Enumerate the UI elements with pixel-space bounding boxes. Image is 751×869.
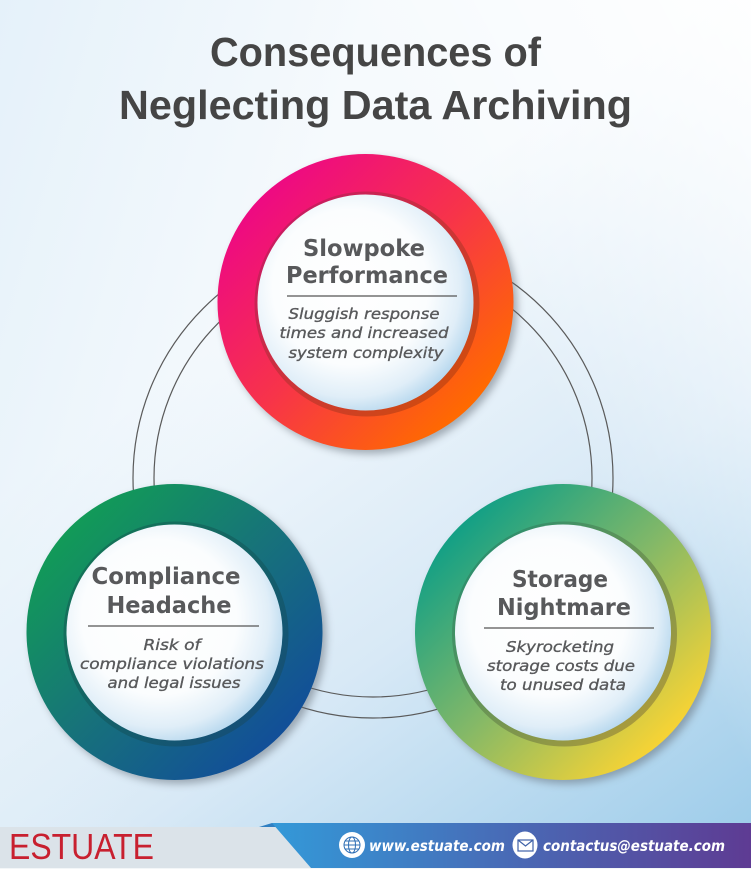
heading bbox=[497, 567, 631, 621]
panel: storage nightmare bbox=[415, 484, 715, 784]
description: storage costs due bbox=[487, 657, 635, 675]
heading: Slowpoke bbox=[303, 236, 425, 262]
description: Risk of bbox=[144, 636, 203, 654]
heading bbox=[286, 236, 448, 289]
website: www.estuate.com bbox=[369, 837, 505, 855]
heading: Compliance bbox=[92, 564, 240, 590]
title bbox=[119, 29, 632, 128]
panel: slowpoke performance bbox=[218, 154, 518, 454]
icon: envelope bbox=[512, 832, 538, 858]
logo: ESTUATE bbox=[9, 826, 154, 867]
description: system complexity bbox=[288, 344, 444, 362]
connecting double ring bbox=[133, 238, 613, 718]
description bbox=[487, 638, 635, 694]
panel: compliance headache bbox=[26, 484, 326, 784]
heading: Headache bbox=[106, 593, 232, 619]
title: Consequences of bbox=[210, 29, 541, 75]
heading: Storage bbox=[512, 567, 608, 593]
title: Neglecting Data Archiving bbox=[119, 82, 632, 128]
description: times and increased bbox=[280, 324, 449, 342]
icon: globe bbox=[339, 832, 365, 858]
heading bbox=[92, 564, 240, 619]
description: compliance violations bbox=[80, 655, 264, 673]
heading: Performance bbox=[286, 263, 448, 289]
footer bbox=[0, 823, 751, 869]
description bbox=[280, 305, 449, 362]
description: Sluggish response bbox=[288, 305, 440, 323]
heading: Nightmare bbox=[497, 595, 631, 621]
email: contactus@estuate.com bbox=[543, 837, 725, 855]
description bbox=[80, 636, 264, 692]
description: Skyrocketing bbox=[506, 638, 614, 656]
description: and legal issues bbox=[108, 674, 240, 692]
description: to unused data bbox=[500, 676, 626, 694]
